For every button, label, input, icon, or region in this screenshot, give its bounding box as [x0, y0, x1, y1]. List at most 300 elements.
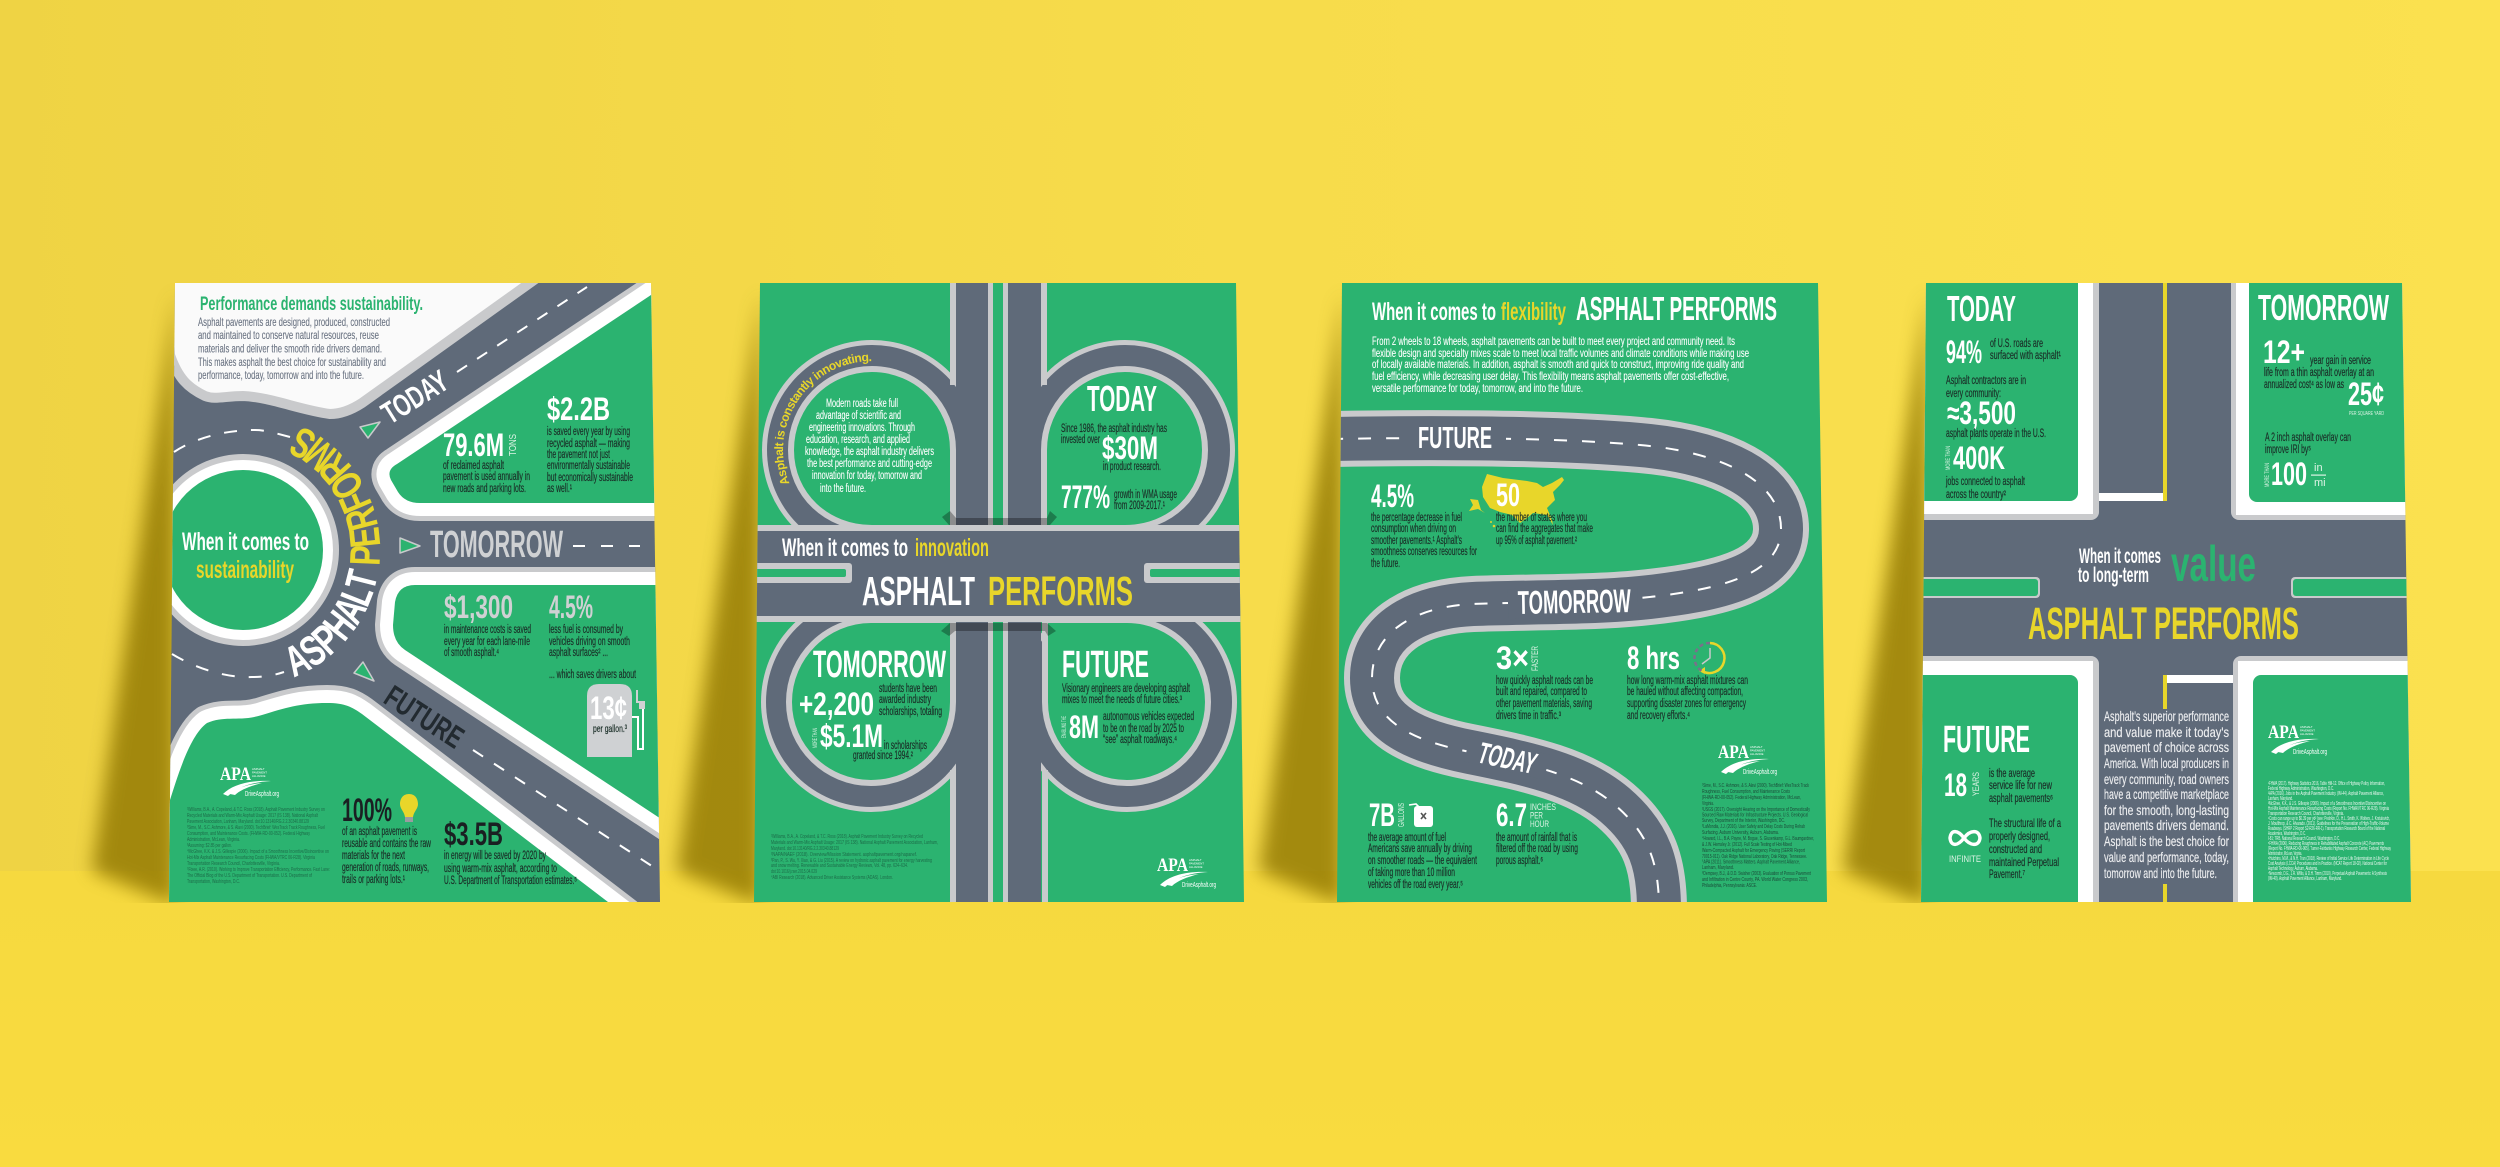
center paragraph: pavement of choice across [2104, 739, 2229, 755]
stat: 7B gallons: the average amount of fuel [1368, 832, 1446, 844]
references: doi:10.1016/j.rser.2015.04.029 [771, 869, 817, 875]
curved headline: asphalt performs: A [276, 633, 317, 686]
references: ¹Williams, B.A., A. Copeland, & T.C. Ross (2018). Asphalt Pavement Industry Survey on [187, 807, 325, 813]
intro paragraph: materials and deliver the smooth ride drivers demand. [198, 342, 382, 356]
loop interiors [789, 369, 1208, 783]
island between today and tomorrow [389, 269, 690, 503]
today block: TODAY [1947, 288, 2016, 329]
curved heading: Asphalt is constantly innovating. [774, 354, 872, 484]
intro paragraph: into the future. [820, 483, 866, 495]
future block: 18 [1944, 767, 1967, 803]
stat: 4.5 percent: 4.5% [1371, 478, 1414, 514]
heading: flexibility [1501, 298, 1566, 326]
tomorrow block: 100 [2271, 456, 2307, 492]
future block: asphalt pavements⁶ [1989, 793, 2053, 805]
references: I-81; TRB, National Research Council, Washington, D.C. [2268, 836, 2340, 842]
stat: 4.5 percent: less fuel is consumed by [549, 624, 623, 636]
road label: future: FUTURE [1418, 420, 1492, 455]
references [1702, 783, 1814, 889]
stat: 3x faster: FASTER [1530, 646, 1540, 671]
heading: to long-term [2078, 564, 2149, 587]
stat: 3.5B: U.S. Department of Transportation estimates.⁵ [444, 875, 577, 887]
stat: 2.2B: recycled asphalt — making [547, 438, 630, 450]
references: ²Sime, M., S.C. Ashmore, & S. Alavi (2000). TechBrief: WesTrack Track Roughness, Fuel [187, 825, 325, 831]
future block: 8M [1069, 709, 1099, 745]
logo: APA: ASPHALT [2300, 725, 2313, 729]
stat: 7B gallons: GALLONS [1397, 803, 1406, 827]
tomorrow block: granted since 1994.² [853, 750, 913, 762]
heading: value [2171, 536, 2256, 592]
tomorrow block [2258, 287, 2389, 492]
today block: $30M [1102, 430, 1158, 466]
today block: Asphalt contractors are in [1946, 375, 2026, 387]
references: & J.W. Hemsley Jr. (2012). Full Scale Testing of Hot-Mixed [1702, 842, 1792, 848]
stat: 3x faster: 3× [1496, 640, 1529, 676]
future block: constructed and [1989, 842, 2042, 856]
stat: 3x faster: built and repaired, compared to [1496, 686, 1587, 698]
intro paragraph: innovation for today, tomorrow and [812, 470, 922, 482]
intro paragraph: education, research, and applied [806, 434, 910, 446]
tomorrow block: mi [2314, 477, 2326, 489]
stat: 4.5 percent: ... which saves drivers about [549, 669, 636, 681]
today block: MORE THAN [1946, 446, 1952, 470]
stat: 2.2B: but economically sustainable [547, 472, 633, 484]
stat: 6.7 inches per hour: HOUR [1530, 819, 1549, 830]
future block: mixes to meet the needs of future cities.³ [1062, 694, 1182, 706]
stat: 100 percent with bulb: generation of roads, runways, [342, 862, 429, 874]
stat: 8 hrs: 8 hrs [1627, 640, 1680, 676]
references: and snow melting. Renewable and Sustainable Energy Reviews, Vol. 48, pp. 624–634. [771, 863, 908, 869]
future block: to be on the road by 2025 to [1103, 723, 1184, 735]
future block: Visionary engineers are developing asphalt [1062, 683, 1190, 695]
main heading: When it comes to [782, 534, 908, 562]
references: ⁴Howard, I.L., B.A. Payne, M. Bogue, S. Glusenkamp, G.L. Baumgardner, [1702, 836, 1814, 842]
references: Warm-Compacted Asphalt for Emergency Paving (SERRI Report [1702, 848, 1805, 854]
stat: 7B gallons: 7B [1369, 797, 1395, 833]
stat: 2.2B: $2.2B [547, 391, 610, 427]
references [187, 807, 330, 885]
intro paragraph: performance, today, tomorrow and into the future. [198, 368, 364, 382]
stat: 3.5B: using warm-mix asphalt, according to [444, 863, 557, 875]
references: Surfacing. Auburn University, Auburn, Alabama. [1702, 830, 1779, 836]
cloverleaf loops [761, 340, 1237, 812]
road label: tomorrow: TOMORROW [1517, 582, 1632, 621]
today block [1945, 288, 2061, 501]
traffic triangles [354, 422, 420, 681]
stat: 8 hrs: and recovery efforts.⁴ [1627, 710, 1690, 722]
road label: today: TODAY [375, 363, 455, 431]
today block: ≈3,500 [1947, 395, 2016, 431]
overpass shadows [941, 511, 1057, 636]
references: Federal Highway Administration, Washington, D.C. [2268, 786, 2334, 792]
logo: APA: ASPHALT [252, 767, 265, 771]
intro paragraph: knowledge, the asphalt industry delivers [805, 446, 934, 458]
lane markings [2099, 275, 2233, 910]
logo: APA: PAVEMENT [1750, 748, 1765, 752]
stat: 1,300: of smooth asphalt.⁴ [444, 647, 499, 659]
stat: 4.5 percent: vehicles driving on smooth [549, 636, 630, 648]
logo: APA: ALLIANCE [1189, 865, 1203, 869]
island: future corner [1900, 656, 2099, 916]
stat: 1,300: $1,300 [444, 589, 513, 625]
future block: YEARS [1971, 772, 1981, 796]
logo: APA [1718, 742, 1777, 776]
vertical roads [950, 275, 1048, 910]
references: Survey, Department of the Interior, Washington, DC. [1702, 818, 1785, 824]
tomorrow block: 25¢ [2348, 376, 2384, 412]
stat: 3x faster: how quickly asphalt roads can be [1496, 675, 1593, 687]
today block [1061, 378, 1177, 515]
references: ⁶Hutchins, M.M., & N.H. Tran (2018). Review of Initial Service Life Determination in Life Cycle [2268, 856, 2389, 862]
icon: fuel can [1409, 804, 1433, 827]
references: Lanham, Maryland. [1702, 865, 1734, 871]
references: Maryland. doi:10.13140/RG.2.2.30340.88129 [771, 846, 839, 852]
references: Academies, Washington, D.C. [2268, 831, 2306, 837]
references: ³McGhee, K.K., & J.S. Gillespie (2006). Impact of a Smoothness Incentive/Disincentive on [2268, 801, 2386, 807]
heading: When it comes [2079, 545, 2161, 568]
intro paragraph [805, 398, 934, 495]
references: ³Pan, P., S. Wu, Y. Xiao, & G. Liu (2015). A review on hydronic asphalt pavement for energy harvesting [771, 858, 932, 864]
today block: 400K [1953, 440, 2005, 476]
references: ³Assuming: $2.85 per gallon. [187, 843, 232, 849]
island: references corner [2233, 656, 2433, 916]
references: ¹Williams, B.A., A. Copeland, & T.C. Ross (2018). Asphalt Pavement Industry Survey on Recycled [771, 834, 923, 840]
stat: 3.5B: $3.5B [444, 816, 503, 852]
references: ²APA (2016). Jobs in the Asphalt Pavement Industry. (IM-44). Asphalt Pavement Alliance, [2268, 791, 2384, 797]
tomorrow block: MORE THAN [813, 728, 819, 748]
horizontal road band [750, 525, 1250, 622]
main heading: innovation [915, 534, 989, 562]
stat: 79.6M tons: of reclaimed asphalt [443, 460, 504, 472]
intro paragraph: advantage of scientific and [816, 410, 901, 422]
icon: clock [1694, 643, 1724, 674]
stat: 4.5 percent: smoothness conserves resources for [1371, 546, 1477, 558]
references [771, 834, 938, 881]
stat: 6.7 inches per hour: 6.7 [1496, 797, 1527, 833]
stat: 50 states [1496, 477, 1593, 547]
references: ¹Sime, M., S.C. Ashmore, & S. Alavi (2000). TechBrief: WesTrack Track [1702, 783, 1809, 789]
curved headline: asphalt performs: M [294, 428, 344, 482]
intro paragraph: From 2 wheels to 18 wheels, asphalt pavements can be built to meet every project and community need. Its [1372, 334, 1735, 348]
center paragraph: Asphalt is the best choice for [2104, 833, 2229, 849]
future block: autonomous vehicles expected [1103, 711, 1194, 723]
tomorrow block: MORE THAN [2265, 463, 2271, 487]
references: ¹FHWA (2017). Highway Statistics 2016, Table HM-12. Office of Highway Policy Information, [2268, 781, 2385, 787]
today block: Since 1986, the asphalt industry has [1061, 423, 1167, 435]
icon: USA map [1469, 474, 1564, 527]
references: ⁶Dempsey, B.J., & D.D. Swisher (2003). Evaluation of Porous Pavement [1702, 871, 1811, 877]
curved headline: asphalt performs: E [339, 525, 390, 550]
main heading [782, 538, 1132, 606]
center paragraph: America. With local producers in [2104, 755, 2229, 771]
today block: of U.S. roads are [1990, 338, 2043, 350]
tomorrow block: students have been [879, 683, 937, 695]
stat: 50 states: the number of states where you [1496, 512, 1587, 524]
center paragraph: tomorrow and into the future. [2104, 865, 2217, 881]
today block: 777% [1061, 479, 1110, 515]
curved headline: asphalt performs: F [329, 484, 381, 520]
tomorrow block: PER SQUARE YARD [2349, 411, 2384, 417]
logo: APA: PAVEMENT [252, 770, 267, 774]
stat: 100 percent with bulb [342, 792, 431, 886]
stat: 4.5 percent: the percentage decrease in fuel [1371, 512, 1462, 524]
future block: “see” asphalt roadways.⁴ [1103, 734, 1177, 746]
references: ²NAPA/NAEF (2018). Overview/Mission Statement. asphaltpavement.org/napanef. [771, 852, 917, 858]
icon: gas pump 13 cents [587, 684, 645, 757]
curved headline: asphalt performs: O [320, 463, 373, 508]
tomorrow block: awarded industry [879, 694, 931, 706]
winding road [1330, 424, 1781, 910]
logo: APA: ALLIANCE [1750, 752, 1764, 756]
future block: service life for new [1989, 780, 2052, 792]
center heading: sustainability [196, 556, 294, 584]
lower left island [150, 703, 625, 915]
stat: 6.7 inches per hour: porous asphalt.⁶ [1496, 855, 1543, 867]
tomorrow block: TOMORROW [2258, 287, 2389, 328]
references: Administration, McLean, Virginia. [187, 837, 240, 843]
today block: growth in WMA usage [1114, 489, 1177, 501]
references: ⁵APA (2011). Smoothness Matters. Asphalt Pavement Alliance, [1702, 860, 1800, 866]
today block: 94% [1946, 334, 1982, 370]
stat: 1,300: in maintenance costs is saved [444, 624, 531, 636]
center paragraph: value and performance, today, [2104, 849, 2229, 865]
references: Transportation Research Council, Charlottesville, Virginia. [2268, 811, 2344, 817]
curved headline: asphalt performs: R [335, 502, 387, 536]
intro paragraph: the best performance and cutting-edge [807, 458, 932, 470]
island between tomorrow and future [393, 585, 690, 838]
curved headline: asphalt performs: P [302, 614, 350, 664]
stat: 8 hrs [1627, 640, 1748, 722]
stat: 8 hrs: how long warm-mix asphalt mixtures can [1627, 675, 1748, 687]
stat: 7B gallons: Americans save annually by driving [1368, 843, 1472, 855]
logo: APA: DriveAsphalt.org [1182, 882, 1216, 889]
heading [1372, 290, 1777, 327]
references: (Report No. FHWA-RD-06-065). Turner-Fairbanks Highway Research Center, Federal Highway [2268, 846, 2391, 852]
stat: 3x faster: other pavement materials, saving [1496, 698, 1592, 710]
references: Lanham, Maryland. [2268, 796, 2293, 802]
intro paragraph [1372, 334, 1749, 395]
stat: 3.5B: in energy will be saved by 2020 by [444, 850, 546, 862]
road label: tomorrow: TOMORROW [430, 524, 563, 566]
references: J. Moulthrop, & C. Alvarado. (2011). Guidelines for the Preservation of High-Traffic-Volume [2268, 821, 2389, 827]
tomorrow block: annualized cost⁴ as low as [2264, 379, 2344, 391]
references: Cost Analysis (LCCA) Procedures and in Practice. (NCAT Report 18-02). National Center for [2268, 861, 2387, 867]
today block: in product research. [1103, 461, 1161, 473]
poster 3: flexibility winding road [1330, 275, 1830, 910]
tomorrow block: year gain in service [2310, 355, 2371, 367]
center paragraph: have a competitive marketplace [2104, 786, 2229, 802]
stat: 1,300 [444, 589, 531, 659]
stat: 4.5 percent: 4.5% [549, 589, 593, 625]
references: ⁷Newcomb, D.E., J.R. Willis, & D.H. Timm (2010). Perpetual Asphalt Pavements: A Synthesis [2268, 871, 2387, 877]
tomorrow block: in scholarships [884, 740, 927, 752]
intro paragraph: engineering innovations. Through [809, 422, 915, 434]
heading [2028, 536, 2299, 649]
center paragraph: pavements drivers demand. [2104, 817, 2229, 833]
stat: 4.5 percent: asphalt surfaces² ... [549, 647, 608, 659]
references: Consumption, and Maintenance Costs. (FHWA-RD-00-052). Federal Highway [187, 831, 310, 837]
stat: 100 percent with bulb: of an asphalt pavement is [342, 826, 417, 838]
today block: TODAY [1087, 378, 1157, 419]
future block: is the average [1989, 768, 2035, 780]
tomorrow block: scholarships, totaling [879, 706, 942, 718]
center paragraph: for the smooth, long-lasting [2104, 802, 2229, 818]
stat: 7B gallons: on smoother roads — the equivalent [1368, 855, 1477, 867]
references: Roadways. (SHRP 2 Report S2-R26-RR-1). Transportation Research Board of the National [2268, 826, 2385, 832]
logo: APA: DriveAsphalt.org [2293, 749, 2327, 756]
stat: 100 percent with bulb: trails or parking lots.¹ [342, 874, 405, 886]
references: (IM-40). Asphalt Pavement Alliance, Lanham, Maryland. [2268, 876, 2342, 882]
stat: 4.5 percent [1371, 478, 1477, 570]
stat: 79.6M tons: 79.6M [443, 427, 504, 463]
stat: 6.7 inches per hour: the amount of rainfall that is [1496, 832, 1577, 844]
references: Hot-Mix Asphalt Maintenance Resurfacing Costs (Report No. FHWA/VTRC 06-R28). Virginia [2268, 806, 2389, 812]
heading: ASPHALT PERFORMS [1576, 290, 1777, 327]
future block [1943, 719, 2061, 881]
references: 70015-011). Oak Ridge National Laboratory, Oak Ridge, Tennessee. [1702, 854, 1807, 860]
poster 2: innovation cloverleaf [754, 283, 1244, 902]
tomorrow block: improve IRI by⁵ [2265, 444, 2311, 456]
stat: 3.5B [444, 816, 577, 887]
intro paragraph: flexible design and specialty mixes scale to meet local traffic volumes and climate conditions while making use [1372, 346, 1749, 360]
references [2268, 781, 2391, 882]
logo: APA: APA [2268, 722, 2299, 743]
tomorrow block: +2,200 [799, 686, 874, 722]
logo: APA: DriveAsphalt.org [245, 791, 279, 798]
references: Administration, McLean, Virginia. [2268, 851, 2302, 857]
intro paragraph: fuel efficiency, while decreasing user delay. This flexibility means asphalt pavements offer cost-effective, [1372, 369, 1729, 383]
heading: When it comes to [1372, 298, 1496, 326]
future block: INFINITE [1949, 854, 1981, 865]
band medians [740, 563, 1254, 583]
today block: surfaced with asphalt¹ [1990, 350, 2061, 362]
logo: APA: ALLIANCE [252, 774, 266, 778]
logo: APA [2268, 722, 2327, 756]
references: (FHWA-RD-00-052). Federal Highway Administration, McLean, [1702, 795, 1801, 801]
future block [1062, 644, 1194, 746]
references: Materials and Warm-Mix Asphalt Usage: 2017 (IS 138). National Asphalt Pavement Association, Lanham, [771, 840, 938, 846]
intro paragraph: of locally available materials. In addition, asphalt is smooth and quick to construct, improving ride quality and [1372, 357, 1744, 371]
icon: gas pump 13 cents: per gallon.³ [593, 723, 627, 735]
tomorrow block: 12+ [2263, 334, 2305, 370]
center circle of roundabout [172, 454, 339, 646]
references: ³LaMondia, J.J. (2016). User Safety and Delay Costs During Rehab [1702, 824, 1805, 830]
stat: 50 states: up 95% of asphalt pavement.² [1496, 535, 1577, 547]
today block: invested over [1061, 434, 1100, 446]
logo: APA: ALLIANCE [2300, 732, 2314, 736]
stat: 3x faster: drivers time in traffic.³ [1496, 710, 1561, 722]
center paragraph [2104, 708, 2229, 881]
logo: APA: DriveAsphalt.org [1743, 769, 1777, 776]
logo: APA: PAVEMENT [1189, 862, 1204, 866]
stat: 2.2B: the pavement not just [547, 449, 610, 461]
heading: ASPHALT PERFORMS [2028, 598, 2299, 649]
stat: 7B gallons [1368, 797, 1477, 891]
future block: The structural life of a [1989, 816, 2061, 830]
stat: 2.2B: is saved every year by using [547, 426, 630, 438]
references: ⁴McGhee, K.K. & J.S. Gillespie (2006). Impact of a Smoothness Incentive/Disincentive on [187, 849, 329, 855]
stat: 2.2B: environmentally sustainable [547, 460, 630, 472]
references: Transportation Research Council, Charlottesville, Virginia. [187, 861, 280, 867]
curved headline: asphalt performs: H [313, 602, 365, 649]
references: Philadelphia, Pennsylvania: ASCE. [1702, 883, 1757, 889]
center paragraph: and value make it today's [2104, 724, 2229, 740]
stat: 2.2B: as well.¹ [547, 483, 572, 495]
stat: 100 percent with bulb: 100% [342, 792, 392, 828]
tomorrow block: TOMORROW [813, 644, 946, 686]
curved headline: asphalt performs: P [340, 544, 390, 566]
stat: 8 hrs: be hauled without affecting compaction, [1627, 686, 1743, 698]
road center dashes [172, 287, 658, 870]
logo: APA: APA [1157, 855, 1188, 876]
stat: 4.5 percent: consumption when driving on [1371, 523, 1456, 535]
stat: 6.7 inches per hour: INCHES [1530, 802, 1556, 813]
island: today corner [1900, 260, 2099, 520]
curved headline: asphalt performs: T [335, 565, 387, 595]
tomorrow block [799, 644, 946, 762]
island: tomorrow corner [2231, 260, 2431, 520]
today block: from 2009-2017.¹ [1114, 500, 1165, 512]
stat: 79.6M tons: new roads and parking lots. [443, 483, 526, 495]
stat: 4.5 percent: the future. [1371, 558, 1400, 570]
intro paragraph: versatile performance for today, tomorrow, and into the future. [1372, 381, 1583, 395]
curved headline: asphalt performs: L [330, 577, 382, 612]
center heading [182, 528, 309, 584]
future block: Pavement.⁷ [1989, 867, 2025, 881]
future block: FUTURE [1943, 719, 2030, 761]
today block: asphalt plants operate in the U.S. [1946, 428, 2046, 440]
icon: gas pump 13 cents: 13¢ [590, 690, 627, 726]
intro paragraph: and maintained to conserve natural resources, reuse [198, 328, 379, 342]
stat: 7B gallons: vehicles off the road every year.⁵ [1368, 879, 1463, 891]
curved headline: asphalt performs: S [282, 417, 323, 470]
future block: maintained Perpetual [1989, 855, 2059, 869]
tomorrow block: in [2314, 462, 2323, 474]
background: yellow wall and floor [74, 0, 2500, 903]
center paragraph: every community, road owners [2104, 771, 2229, 787]
road label: future: FUTURE [378, 679, 470, 755]
references: The Official Blog of the U.S. Department of Transportation. U.S. Department of [187, 873, 312, 879]
stat: 50 states: can find the aggregates that make [1496, 523, 1593, 535]
stat: 2.2B [547, 391, 633, 495]
today block: jobs connected to asphalt [1945, 476, 2025, 488]
references: Roughness, Fuel Consumption, and Maintenance Costs [1702, 789, 1790, 795]
stat: 6.7 inches per hour: filtered off the road by using [1496, 843, 1578, 855]
stat: 6.7 inches per hour: PER [1530, 810, 1543, 822]
stat: 100 percent with bulb: reusable and contains the raw [342, 838, 431, 850]
curved headline: asphalt performs: R [309, 445, 360, 493]
logo: APA: ASPHALT [1750, 745, 1763, 749]
curved headline: asphalt performs: A [323, 588, 376, 631]
poster 4: value intersection [1900, 260, 2433, 916]
stat: 50 states: 50 [1496, 477, 1520, 513]
main heading: ASPHALT [862, 568, 975, 614]
references: Recycled Materials and Warm-Mix Asphalt Usage: 2017 (IS 138). National Asphalt [187, 813, 318, 819]
center paragraph: Asphalt's superior performance [2104, 708, 2229, 724]
stat: 4.5 percent [549, 589, 636, 681]
references: Sourced Raw Materials for Infrastructure Projects. U.S. Geological [1702, 812, 1808, 818]
stat: 7B gallons: of taking more than 10 million [1368, 867, 1455, 879]
top white panel [174, 283, 538, 419]
tomorrow block: A 2 inch asphalt overlay can [2265, 432, 2351, 444]
today block: every community: [1946, 388, 2001, 400]
logo: APA: APA [1718, 742, 1749, 763]
today block: across the country² [1946, 489, 2006, 501]
references: ⁵FHWA (2006). Reducing Roughness in Rehabilitated Asphalt Concrete (AC) Pavements [2268, 841, 2384, 847]
stat: 6.7 inches per hour [1496, 797, 1578, 867]
center heading: When it comes to [182, 528, 309, 556]
future block: FUTURE [1062, 644, 1149, 686]
